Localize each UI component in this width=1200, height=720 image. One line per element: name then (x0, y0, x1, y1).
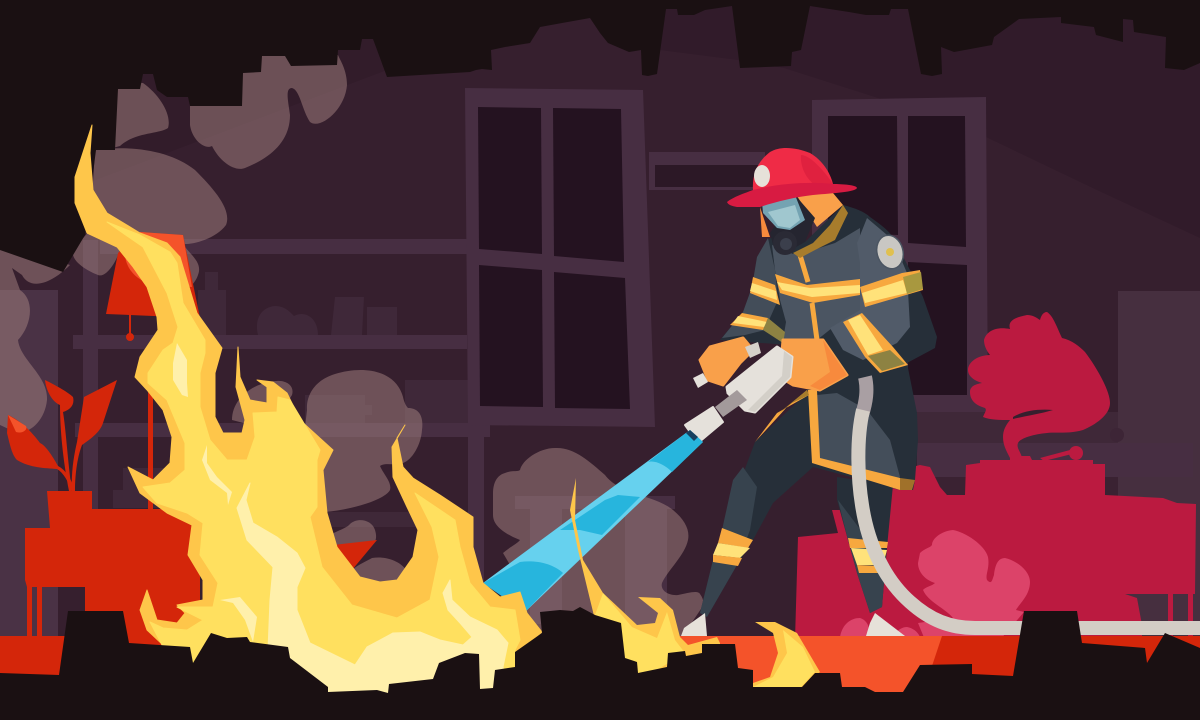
sleeve band (860, 270, 923, 307)
smoke: behind flame centre (300, 370, 422, 512)
smoke: right of beam (493, 448, 703, 640)
wall box (649, 152, 767, 190)
plant (25, 491, 200, 645)
collar (793, 205, 848, 258)
smoke: far left (0, 240, 70, 432)
flame inner (107, 222, 520, 700)
left forearm band (730, 313, 785, 343)
small flame on floor (753, 622, 820, 690)
coat trim (808, 390, 900, 490)
side table behind gramophone (917, 412, 1193, 507)
breathing mask (762, 195, 815, 255)
panel: left wall panel (0, 290, 58, 640)
horn slit (1013, 410, 1053, 419)
pink smoke (840, 530, 1030, 640)
main flame (75, 125, 542, 700)
tone arm (1040, 450, 1072, 461)
smoke: large near lamp (73, 148, 227, 296)
panel: right wall cabinet (1118, 291, 1200, 636)
smoke clouds (0, 50, 703, 640)
flame highlight: centre (202, 445, 232, 505)
boots (681, 613, 905, 636)
right forearm band (843, 313, 908, 373)
arm and chest (722, 238, 778, 338)
coat tail panel (813, 393, 900, 487)
cabinet (795, 456, 1196, 640)
water jet (483, 430, 703, 612)
nozzle (685, 342, 792, 443)
flame highlight: lower (220, 597, 257, 642)
chest seam (800, 255, 817, 340)
floor (0, 636, 1200, 720)
shoulder patch (873, 232, 907, 272)
red triangle debris (333, 540, 377, 570)
ceiling rubble silhouette (0, 0, 1200, 272)
smoke: upper centre (190, 50, 347, 169)
left leg (700, 390, 813, 617)
hood (760, 193, 843, 237)
left upper arm band (750, 277, 780, 305)
shelving unit (73, 239, 490, 615)
lamp (106, 232, 200, 510)
small flame near jet (570, 478, 720, 680)
gramophone horn (968, 312, 1110, 458)
red table and plant (7, 380, 200, 645)
helmet (727, 148, 857, 207)
flame outer (75, 125, 542, 700)
foreground rubble silhouette (0, 607, 1200, 720)
flame highlight: column (173, 343, 188, 397)
left shin stripes (713, 528, 753, 566)
pedestal behind smoke (515, 496, 675, 634)
hose (858, 377, 1200, 628)
gloves (700, 338, 847, 390)
flame highlight: base (237, 483, 510, 700)
smoke: small behind flame (232, 381, 293, 430)
right leg (837, 477, 893, 613)
smoke: low centre (325, 520, 376, 548)
gramophone and cabinet (795, 312, 1196, 640)
window: left large window (465, 88, 655, 427)
coat body (720, 205, 937, 490)
window: right window (812, 97, 988, 412)
leaf smoke highlight (8, 415, 26, 433)
chest reflective band (775, 274, 860, 303)
shelf ornaments (113, 272, 468, 508)
right shin stripes (848, 538, 888, 573)
smoke: upper left (105, 80, 169, 150)
